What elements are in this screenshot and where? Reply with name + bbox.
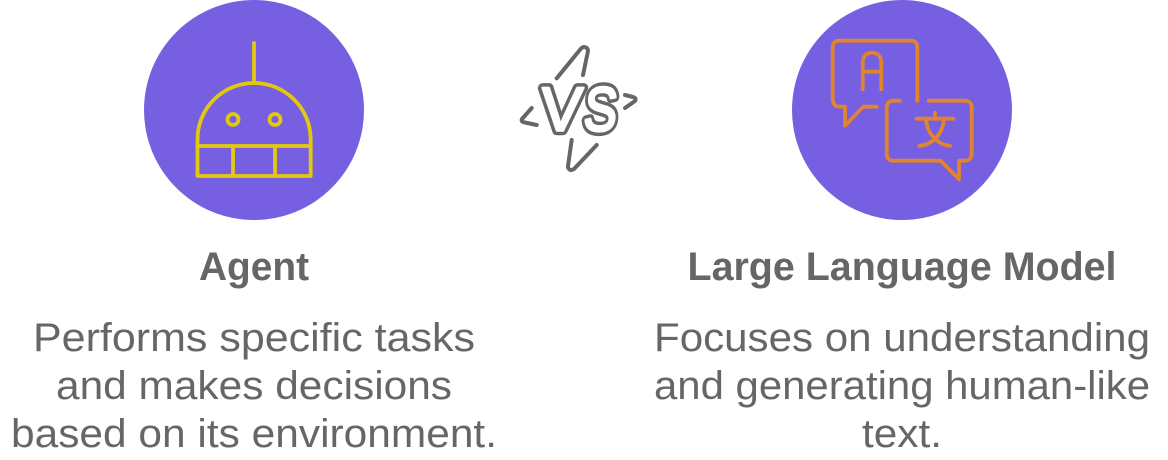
llm description: and generating human-like bbox=[654, 364, 1150, 408]
lightning stroke bottom bbox=[568, 140, 597, 170]
lightning stroke right bbox=[625, 95, 636, 108]
agent description: and makes decisions bbox=[56, 364, 452, 408]
llm icon circle bbox=[792, 0, 1012, 220]
agent icon circle bbox=[144, 0, 364, 220]
vs label: S bbox=[581, 74, 620, 144]
agent description: based on its environment. bbox=[11, 412, 497, 456]
vs label bbox=[538, 74, 620, 144]
llm heading: Large Language Model bbox=[688, 245, 1116, 289]
vs label: S bbox=[581, 74, 620, 144]
versus badge bbox=[522, 47, 636, 170]
vs label: V bbox=[538, 76, 585, 144]
agent heading: Agent bbox=[199, 245, 309, 289]
icon: translation bubbles bbox=[833, 41, 972, 179]
panel: agent bbox=[11, 0, 497, 456]
agent description: Performs specific tasks bbox=[33, 316, 475, 360]
icon: robot bbox=[198, 43, 311, 176]
llm description bbox=[654, 316, 1150, 456]
llm description: text. bbox=[862, 412, 942, 456]
lightning stroke top bbox=[557, 47, 588, 78]
agent description bbox=[11, 316, 497, 456]
vs label: V bbox=[538, 76, 585, 144]
panel: large language model bbox=[654, 0, 1150, 456]
lightning stroke left bbox=[522, 108, 537, 125]
llm description: Focuses on understanding bbox=[654, 316, 1150, 360]
